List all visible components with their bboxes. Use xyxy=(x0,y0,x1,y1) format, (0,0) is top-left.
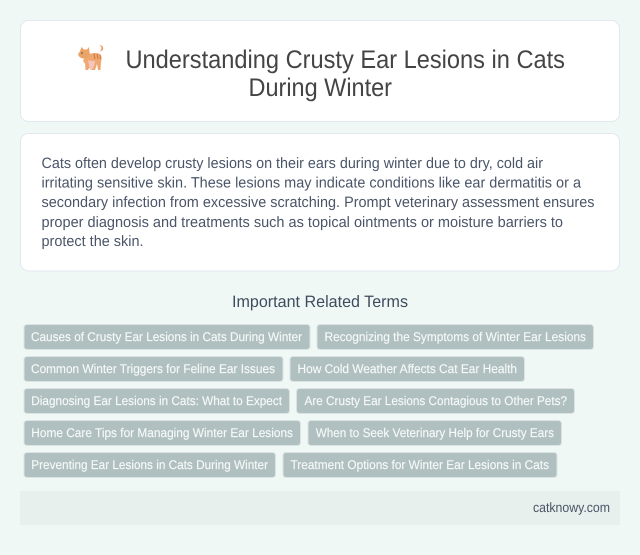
tag: causes: Causes of Crusty Ear Lesions in Cats During Winter xyxy=(31,330,302,344)
panel: description card xyxy=(20,134,620,271)
description text: proper diagnosis and treatments such as topical ointments or moisture barriers to xyxy=(42,214,563,231)
tag: treatment xyxy=(283,452,557,478)
tag: veterinary help xyxy=(308,420,562,446)
tag: preventing: Preventing Ear Lesions in Cats During Winter xyxy=(31,458,268,472)
tag: triggers: Common Winter Triggers for Feline Ear Issues xyxy=(31,362,275,376)
tag: veterinary help: When to Seek Veterinary Help for Crusty Ears xyxy=(316,426,554,440)
title text: During Winter xyxy=(248,74,392,102)
description text: Cats often develop crusty lesions on their ears during winter due to dry, cold air xyxy=(42,155,543,172)
tag: diagnosing xyxy=(24,388,290,414)
footer xyxy=(20,491,620,525)
description text xyxy=(42,155,594,250)
title text xyxy=(126,46,565,102)
tag: home care: Home Care Tips for Managing Winter Ear Lesions xyxy=(31,426,293,440)
tag: home care xyxy=(24,420,300,446)
tag: triggers xyxy=(24,356,283,382)
tag: treatment: Treatment Options for Winter Ear Lesions in Cats xyxy=(290,458,549,472)
tag: contagious: Are Crusty Ear Lesions Contagious to Other Pets? xyxy=(304,394,567,408)
description text: irritating sensitive skin. These lesions may indicate conditions like ear dermatitis or a xyxy=(42,174,582,192)
description text: protect the skin. xyxy=(42,233,144,250)
description text: secondary infection from excessive scratching. Prompt veterinary assessment ensures xyxy=(42,194,594,211)
footer source text: catknowy.com xyxy=(533,500,610,515)
tag: symptoms: Recognizing the Symptoms of Winter Ear Lesions xyxy=(324,330,586,344)
tag: causes xyxy=(24,324,310,350)
tag: contagious xyxy=(296,388,574,414)
tag: cold weather: How Cold Weather Affects Cat Ear Health xyxy=(298,362,517,376)
tag: symptoms xyxy=(317,324,594,350)
tag: cold weather xyxy=(290,356,524,382)
icon: cat xyxy=(78,45,103,70)
tag: preventing xyxy=(24,452,276,478)
title text: Understanding Crusty Ear Lesions in Cats xyxy=(126,46,565,74)
panel: title card xyxy=(20,20,620,122)
tag list xyxy=(24,324,594,478)
tag: diagnosing: Diagnosing Ear Lesions in Cats: What to Expect xyxy=(31,394,282,408)
heading: important related terms: Important Related Terms xyxy=(232,293,408,311)
